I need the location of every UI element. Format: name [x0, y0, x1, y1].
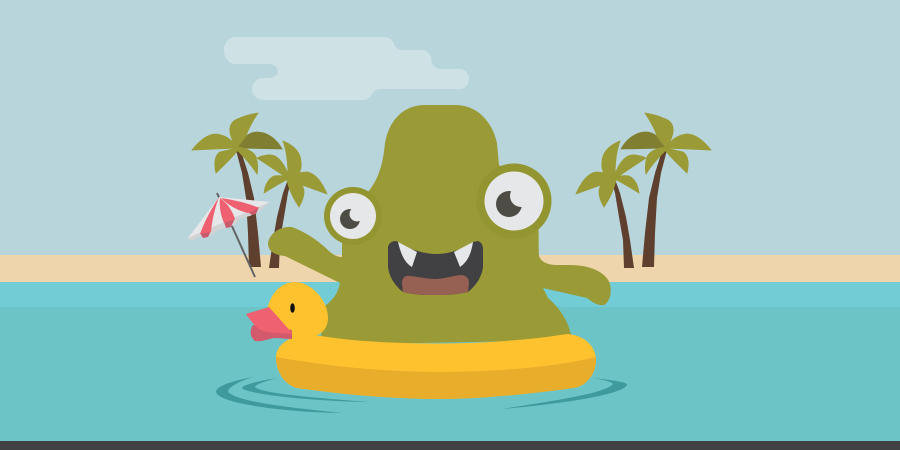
- sea: [0, 307, 900, 442]
- duck upper beak: [246, 307, 292, 334]
- right eye: [476, 164, 552, 238]
- small palm leaves: [576, 141, 646, 207]
- duck eye: [290, 303, 295, 313]
- umbrella canopy: [188, 197, 270, 238]
- tongue: [402, 275, 469, 295]
- big palm trunk: [642, 148, 667, 267]
- sky: [0, 0, 900, 256]
- rubber duck float: [246, 282, 596, 399]
- float ring shade: [276, 357, 596, 399]
- monster body: [268, 105, 611, 345]
- small palm leaves: [257, 141, 327, 207]
- mouth: [388, 241, 483, 295]
- umbrella red stripes: [200, 197, 259, 234]
- umbrella pole: [217, 193, 255, 277]
- right palm trees: [576, 113, 711, 268]
- small palm trunk: [269, 182, 291, 268]
- left palm trees: [192, 113, 327, 268]
- cloud: [224, 37, 469, 100]
- umbrella red stripes shadow: [200, 207, 259, 238]
- monster: [268, 105, 611, 345]
- beach umbrella: [188, 193, 270, 277]
- water ripples: [216, 377, 627, 413]
- big palm leaves: [192, 113, 282, 174]
- small palm trunk: [612, 182, 634, 268]
- big palm trunk: [236, 148, 261, 267]
- duck lower beak: [251, 325, 292, 341]
- shallow water band: [0, 282, 900, 308]
- duck head: [267, 282, 328, 345]
- sand beach: [0, 255, 900, 283]
- big palm leaves: [621, 113, 711, 174]
- left eye: [324, 187, 382, 245]
- bottom bar: [0, 441, 900, 450]
- float ring: [276, 334, 596, 399]
- right fang: [454, 242, 473, 267]
- umbrella canopy shadow: [188, 202, 270, 241]
- left fang: [398, 242, 417, 267]
